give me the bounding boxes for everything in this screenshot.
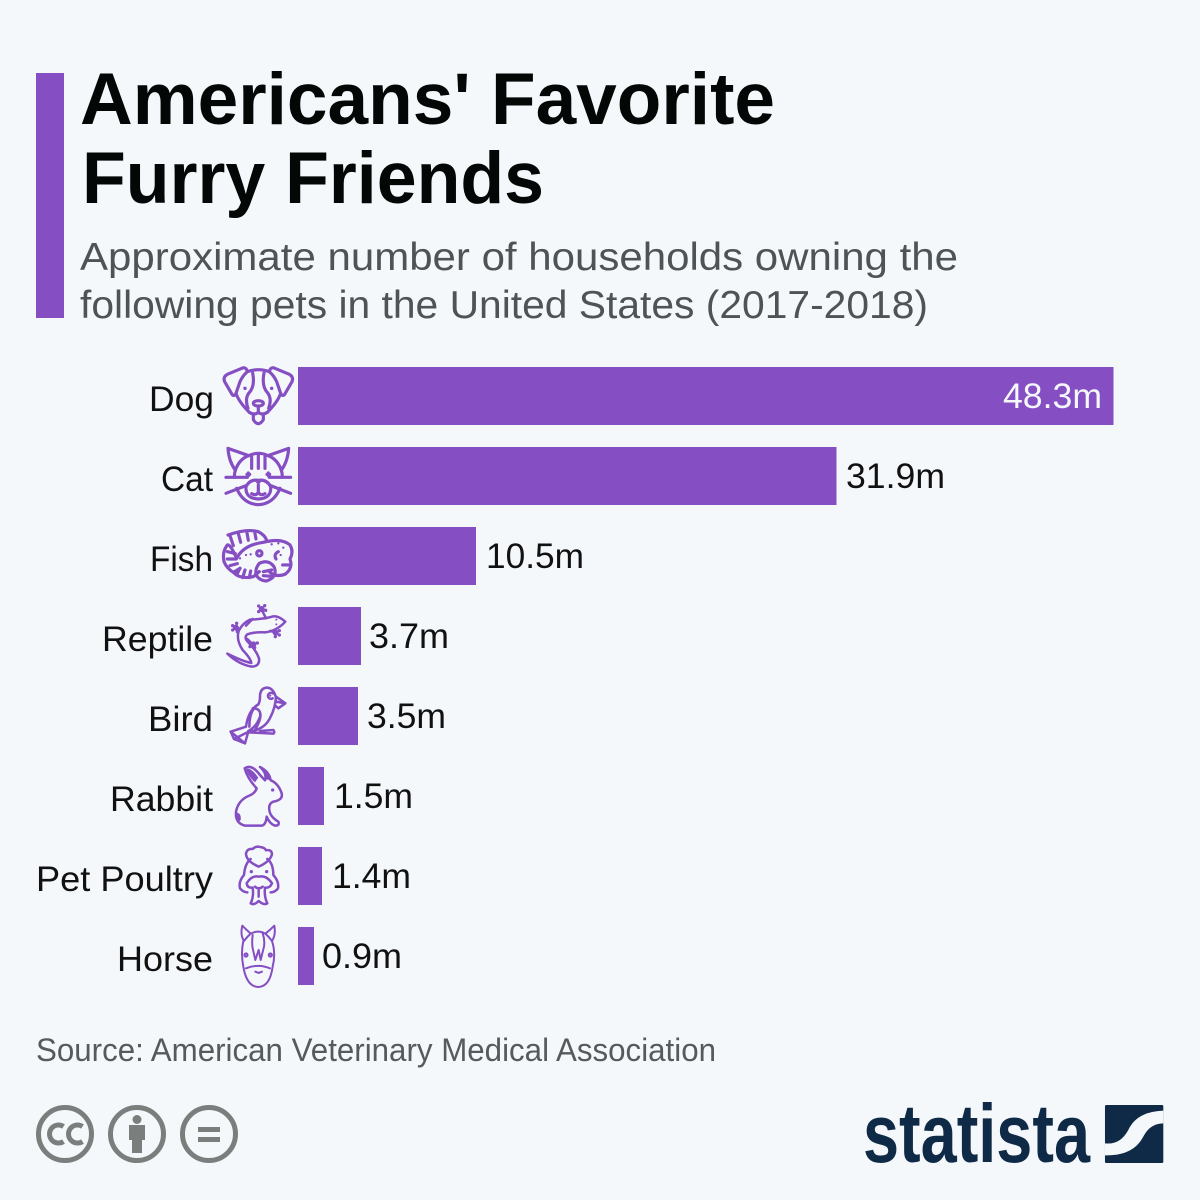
title: Furry Friends — [82, 138, 544, 219]
row: Cat: 31.9m — [846, 457, 945, 496]
row: Cat — [161, 447, 945, 505]
icon: attribution — [110, 1108, 164, 1160]
accent bar — [36, 73, 64, 318]
title: Americans' Favorite — [80, 59, 775, 140]
row: Reptile — [102, 604, 449, 667]
subtitle — [80, 236, 958, 327]
row: Rabbit: Rabbit — [110, 780, 213, 819]
row: Fish: 10.5m — [486, 537, 584, 576]
row: Fish: Fish — [150, 540, 213, 579]
row: Horse — [117, 926, 402, 987]
icon: poultry — [240, 847, 278, 904]
row: Dog: 48.3m — [1003, 377, 1102, 416]
row: Pet Poultry — [36, 847, 411, 905]
title — [80, 59, 775, 219]
row: Horse: 0.9m — [322, 937, 402, 976]
subtitle: following pets in the United States (2017-2018) — [80, 284, 928, 327]
icon: reptile — [227, 604, 285, 667]
icon: no derivatives — [182, 1108, 236, 1160]
row: Pet Poultry: 1.4m — [332, 857, 411, 896]
icon: cc license — [38, 1108, 92, 1160]
icon: rabbit — [235, 767, 282, 826]
row: Bird — [148, 687, 446, 745]
row: Fish — [150, 527, 584, 585]
statista logo: statista — [863, 1087, 1091, 1180]
icon: bird — [231, 688, 285, 743]
row: Pet Poultry: Pet Poultry — [36, 860, 214, 899]
icon: cat — [226, 448, 291, 505]
bar chart — [36, 367, 1114, 987]
row: Horse: Horse — [117, 940, 213, 979]
row: Dog — [149, 367, 1114, 425]
icon: fish — [223, 531, 292, 581]
icon: horse — [241, 926, 275, 987]
icon: statista mark — [1105, 1105, 1163, 1163]
icon: dog — [224, 368, 293, 424]
row: Rabbit: 1.5m — [334, 777, 413, 816]
row: Reptile: 3.7m — [369, 617, 449, 656]
row: Reptile: Reptile — [102, 620, 213, 659]
row: Bird: 3.5m — [367, 697, 446, 736]
row: Dog: Dog — [149, 380, 214, 419]
source: Source: American Veterinary Medical Association — [36, 1032, 716, 1068]
subtitle: Approximate number of households owning the — [80, 236, 958, 279]
row: Cat: Cat — [161, 460, 213, 499]
row: Bird: Bird — [148, 700, 213, 739]
row: Rabbit — [110, 767, 413, 826]
